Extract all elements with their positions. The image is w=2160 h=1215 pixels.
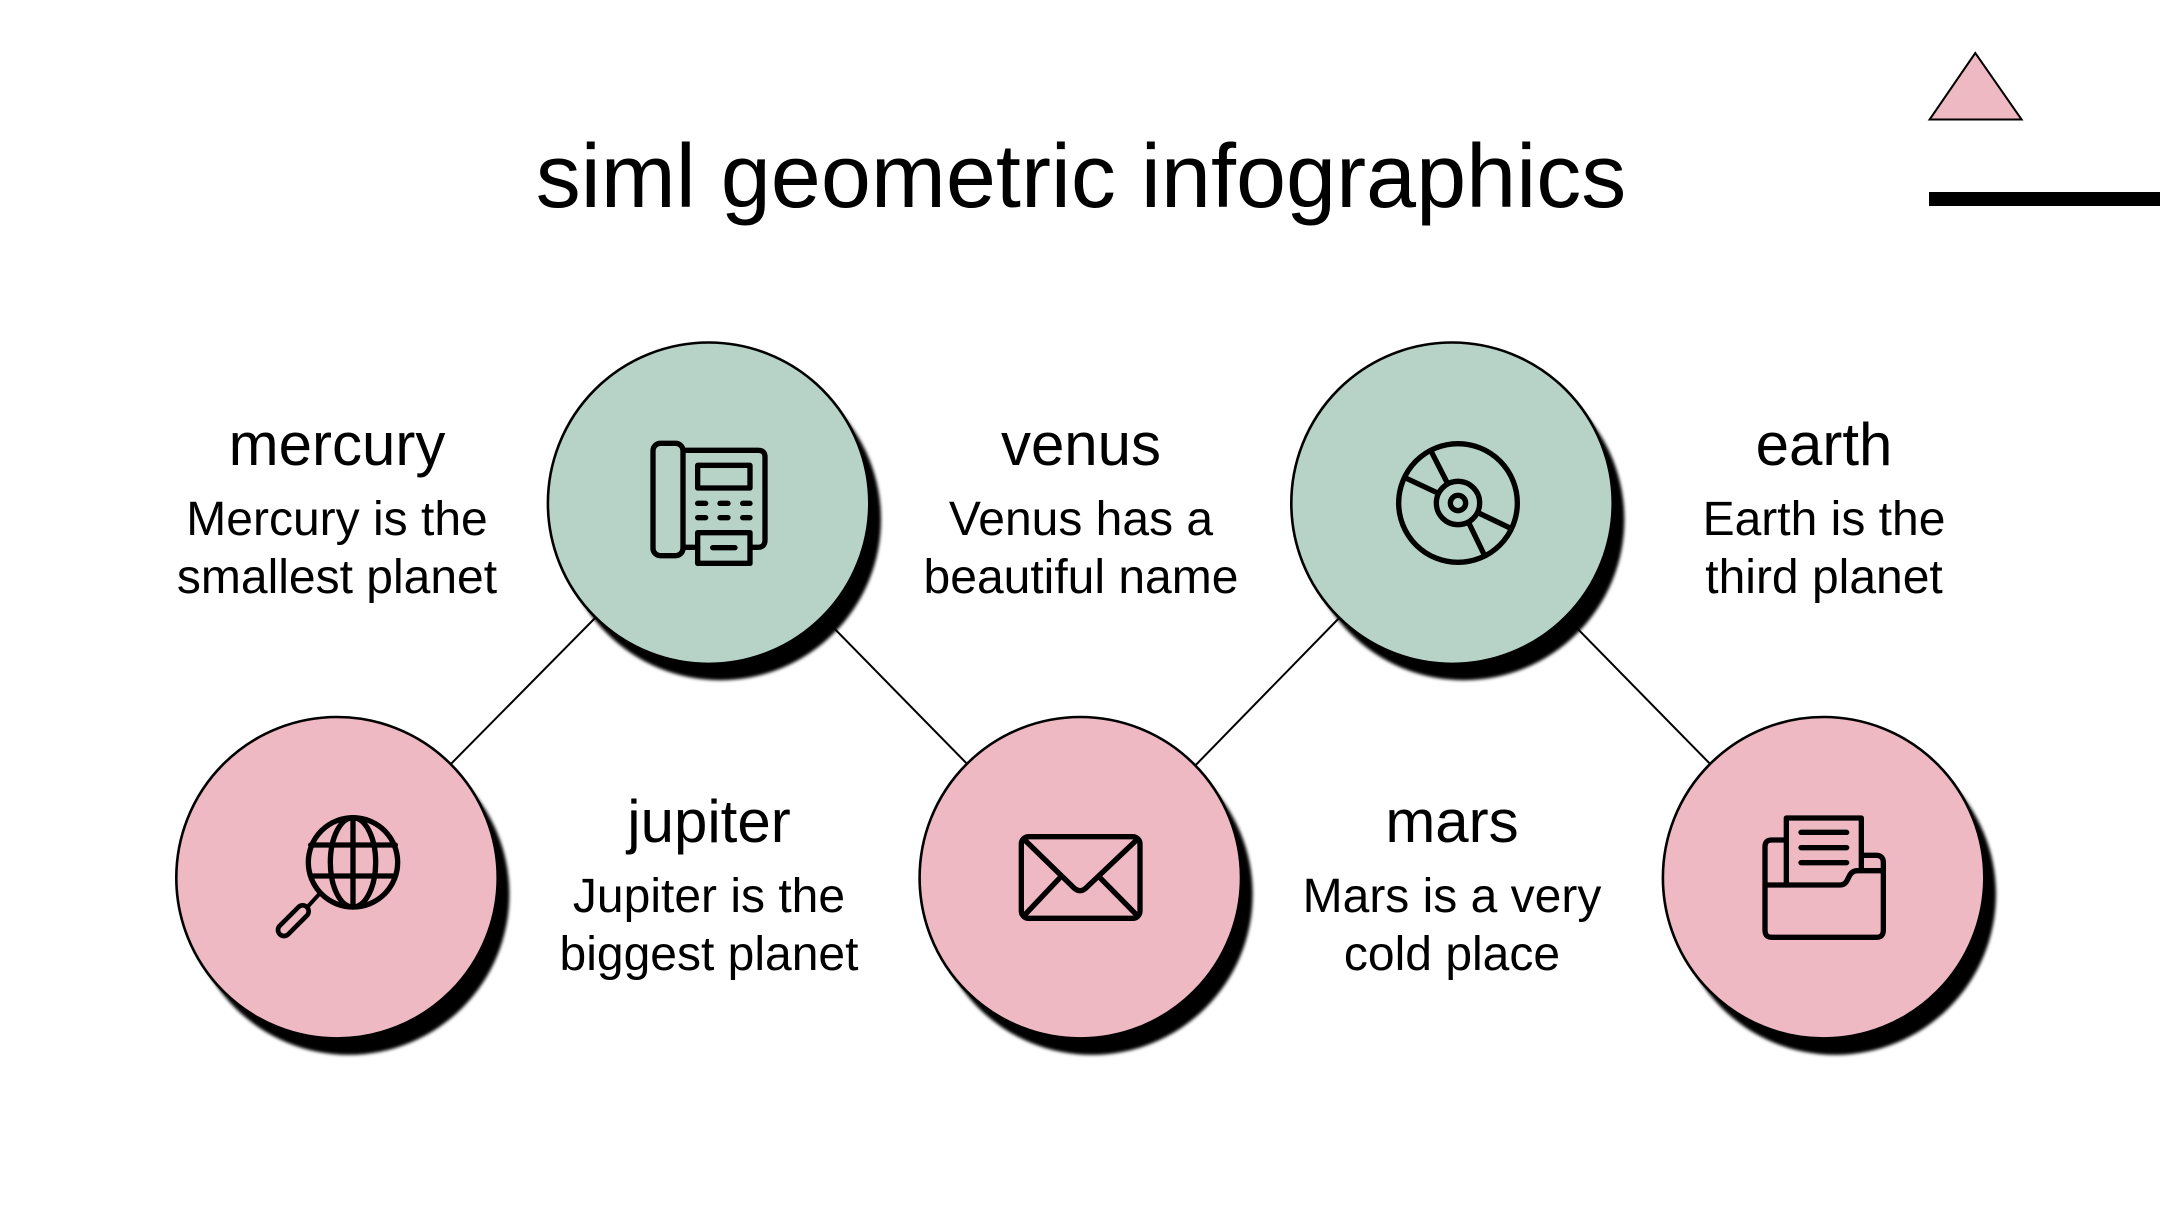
title: siml geometric infographics	[536, 127, 1626, 227]
text block: mercury: Mercury is the	[186, 493, 488, 546]
text block: venus	[924, 411, 1238, 604]
node: disc circle	[1291, 342, 1624, 680]
node: globe circle	[176, 717, 509, 1055]
decorative black bar	[1929, 192, 2160, 206]
text block: venus: beautiful name	[924, 551, 1238, 604]
text block: mars: cold place	[1344, 928, 1560, 981]
icon: envelope	[1021, 837, 1140, 918]
connector lines	[440, 613, 1719, 775]
node: telephone circle	[548, 342, 881, 680]
text block: mars: Mars is a very	[1303, 870, 1601, 923]
text block: earth	[1703, 411, 1945, 604]
icon: folder with document	[1765, 818, 1883, 937]
icon: desk telephone	[653, 443, 765, 563]
icon: globe with magnifier handle	[284, 818, 398, 930]
text block: venus: venus	[1001, 411, 1161, 478]
text block: earth: Earth is the	[1703, 493, 1945, 546]
text block: jupiter: jupiter	[625, 788, 791, 855]
text block: earth: earth	[1756, 411, 1892, 478]
text block: mercury: mercury	[229, 411, 445, 478]
icon: compact disc	[1399, 444, 1517, 562]
text block: mercury	[177, 411, 497, 604]
node: folder circle	[1663, 717, 1996, 1055]
text block: mars	[1303, 788, 1601, 981]
text block: jupiter: Jupiter is the	[573, 870, 845, 923]
text block: earth: third planet	[1705, 551, 1943, 604]
text block: jupiter	[560, 788, 858, 981]
node: envelope circle	[920, 717, 1253, 1055]
text block: mercury: smallest planet	[177, 551, 497, 604]
text block: jupiter: biggest planet	[560, 928, 858, 981]
text block: venus: Venus has a	[949, 493, 1213, 546]
decorative triangle	[1930, 53, 2022, 120]
text block: mars: mars	[1385, 788, 1519, 855]
